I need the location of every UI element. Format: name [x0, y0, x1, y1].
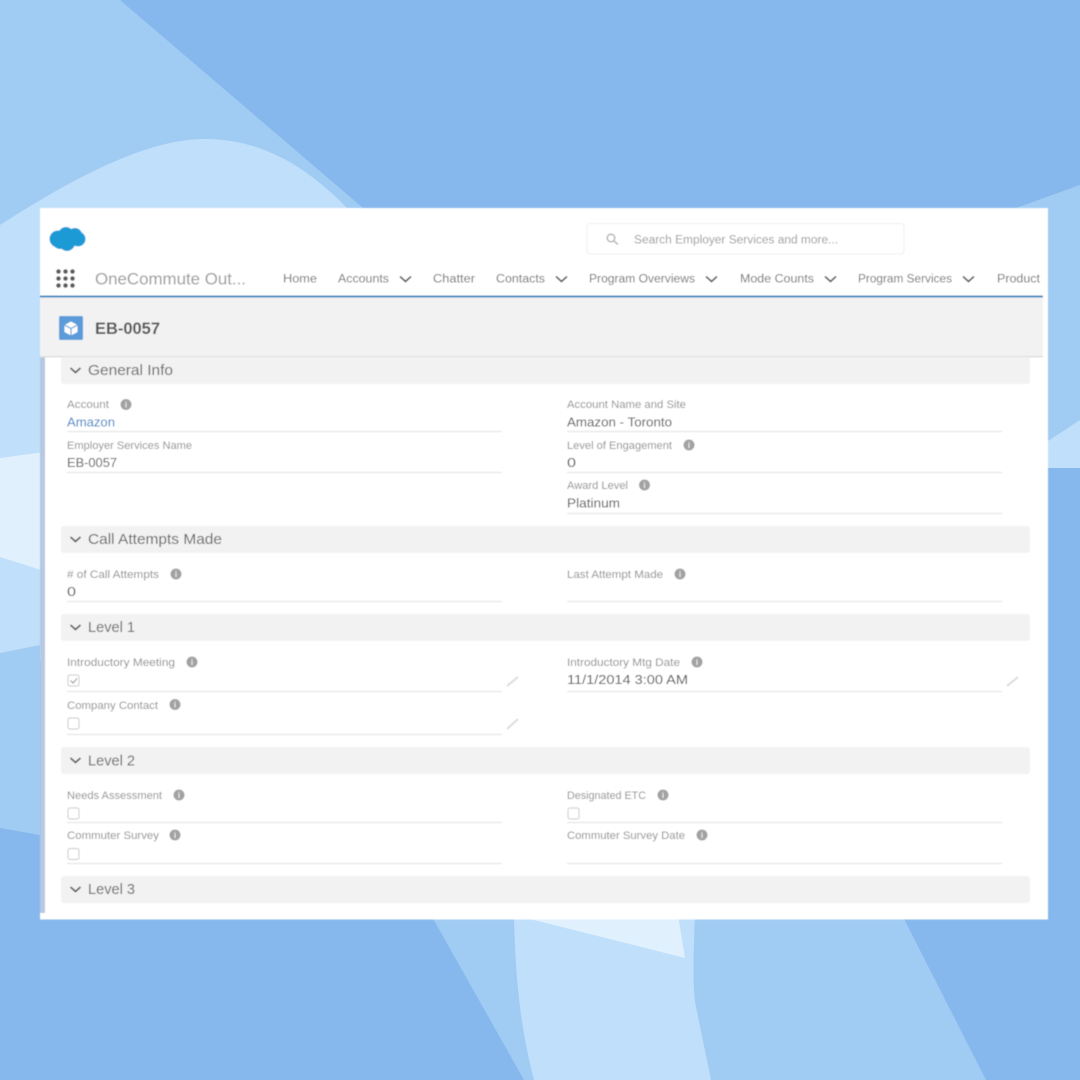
- navigation menu: Product: [997, 274, 1041, 286]
- navigation menu: Program Overviews: [589, 274, 695, 286]
- icon: app launcher: [56, 269, 75, 288]
- section: Level 3: Level 3: [88, 882, 135, 898]
- section: General Info: Account: [67, 399, 109, 411]
- navigation menu: [283, 274, 1041, 286]
- section: Level 1: i: [191, 658, 193, 667]
- section: General Info: Amazon - Toronto: [567, 414, 672, 430]
- navigation menu: Accounts: [338, 274, 389, 286]
- section: General Info: i: [643, 481, 646, 490]
- section: Level 2: [61, 747, 1030, 864]
- navigation menu: Program Services: [858, 274, 952, 286]
- section: Call Attempts Made: i: [175, 570, 177, 579]
- section: General Info: i: [125, 400, 127, 410]
- section: Call Attempts Made: Last Attempt Made: [567, 569, 663, 581]
- section: General Info: EB-0057: [67, 455, 117, 470]
- search box: Search Employer Services and more...: [634, 234, 838, 246]
- section: General Info: Platinum: [567, 496, 620, 510]
- section: Level 2: Commuter Survey: [67, 830, 160, 842]
- section: Level 2: Designated ETC: [567, 790, 646, 802]
- section: Call Attempts Made: 0: [67, 584, 76, 599]
- section: Call Attempts Made: # of Call Attempts: [67, 569, 160, 581]
- section: General Info: Employer Services Name: [67, 440, 192, 452]
- navigation menu: Contacts: [496, 274, 545, 286]
- section: Level 2: Level 2: [88, 754, 135, 770]
- section: Level 1: Company Contact: [67, 700, 158, 712]
- record title: EB-0057: [95, 320, 160, 338]
- section: Level 1: i: [174, 700, 176, 710]
- section: Level 1: i: [696, 658, 698, 667]
- section: Level 1: Introductory Mtg Date: [567, 657, 680, 669]
- section: General Info: Account Name and Site: [567, 399, 686, 411]
- section: General Info: Award Level: [567, 480, 628, 492]
- section: Level 1: [61, 614, 1030, 734]
- section: Level 3: [61, 876, 1030, 903]
- navigation menu: Mode Counts: [740, 274, 814, 286]
- section: General Info: Level of Engagement: [567, 440, 672, 452]
- navigation menu: Home: [283, 274, 317, 286]
- navigation menu: Chatter: [433, 274, 475, 286]
- section: Call Attempts Made: i: [679, 570, 681, 579]
- search box: [587, 224, 904, 254]
- icon: cloud logo: [50, 227, 86, 251]
- section: Level 2: i: [701, 831, 703, 840]
- section: Level 2: Needs Assessment: [67, 790, 162, 802]
- section: General Info: i: [688, 441, 690, 450]
- section: Level 1: Level 1: [88, 620, 135, 636]
- panel: application window: [40, 208, 1048, 920]
- section: Level 2: i: [178, 791, 180, 800]
- section: Call Attempts Made: [61, 526, 1030, 602]
- icon: record cube: [59, 316, 83, 340]
- section: Level 2: i: [174, 831, 176, 840]
- section: Level 1: Introductory Meeting: [67, 657, 175, 669]
- section: Level 2: Commuter Survey Date: [567, 830, 685, 842]
- section: General Info: [61, 357, 1030, 514]
- left accent bar: [40, 357, 45, 913]
- section: General Info: Amazon: [67, 414, 115, 430]
- section: Level 1: 11/1/2014 3:00 AM: [567, 672, 688, 687]
- section: General Info: General Info: [88, 363, 173, 379]
- section: Level 2: i: [662, 791, 664, 800]
- section: Call Attempts Made: Call Attempts Made: [88, 532, 222, 548]
- section: General Info: 0: [567, 455, 576, 470]
- record header band: [40, 296, 1043, 358]
- app name: OneCommute Out...: [95, 270, 246, 288]
